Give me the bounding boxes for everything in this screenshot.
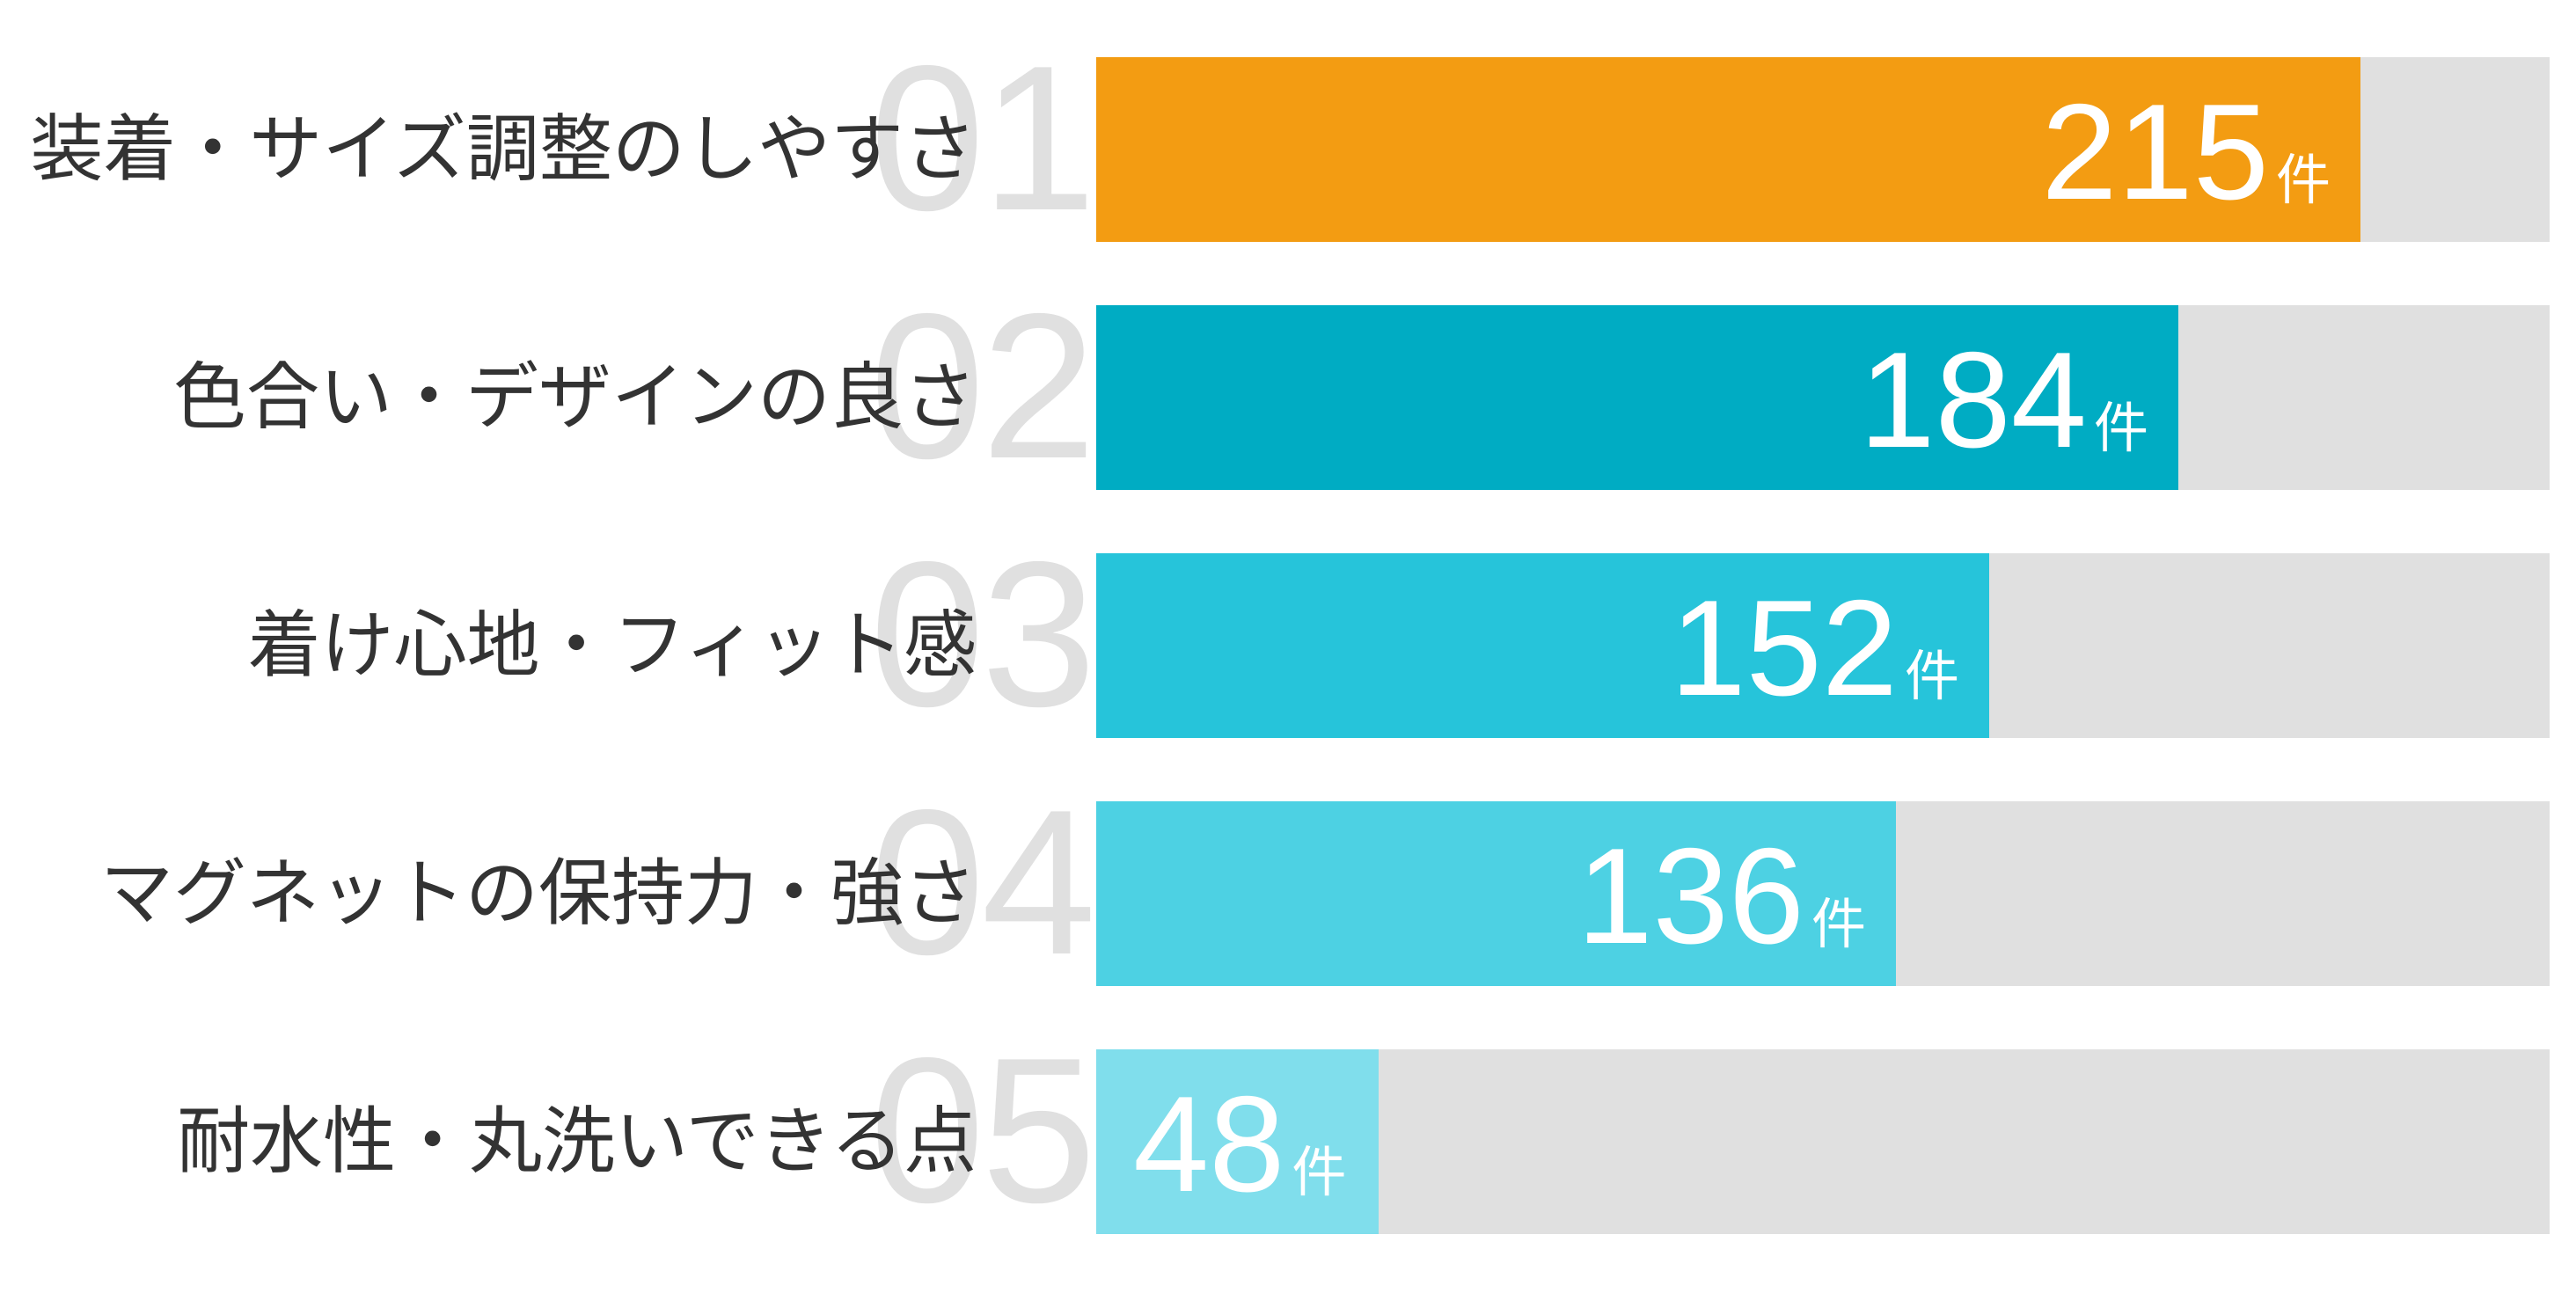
bar track 2: 184件: [1859, 324, 2148, 476]
bar track 3: [1096, 553, 2550, 738]
rank number 02: 02: [870, 270, 1093, 501]
rank number 04: 04: [870, 766, 1093, 997]
label 2: 色合い・デザインの良さ: [173, 356, 977, 438]
bar track 2: [1096, 305, 2550, 490]
bar track 5: [1096, 1049, 2550, 1234]
label 3: 着け心地・フィット感: [248, 604, 977, 686]
rank number 05: 05: [870, 1014, 1093, 1246]
label 5: 耐水性・丸洗いできる点: [177, 1100, 977, 1182]
bar track 5: 48件: [1133, 1068, 1346, 1220]
row 3: [248, 518, 2550, 749]
row 4: [100, 766, 2550, 997]
row 2: [173, 270, 2550, 501]
row 1: [30, 22, 2550, 253]
label 4: マグネットの保持力・強さ: [100, 852, 977, 934]
bar track 4: 136件: [1577, 820, 1866, 972]
bar track 4: [1096, 801, 2550, 986]
rank number 03: 03: [870, 518, 1093, 749]
row 5: [177, 1014, 2550, 1246]
rank number 01: 01: [870, 22, 1093, 253]
bar track 1: 215件: [2041, 76, 2331, 228]
bar track 3: 152件: [1670, 572, 1959, 724]
bar track 1: [1096, 57, 2550, 242]
label 1: 装着・サイズ調整のしやすさ: [30, 108, 977, 190]
